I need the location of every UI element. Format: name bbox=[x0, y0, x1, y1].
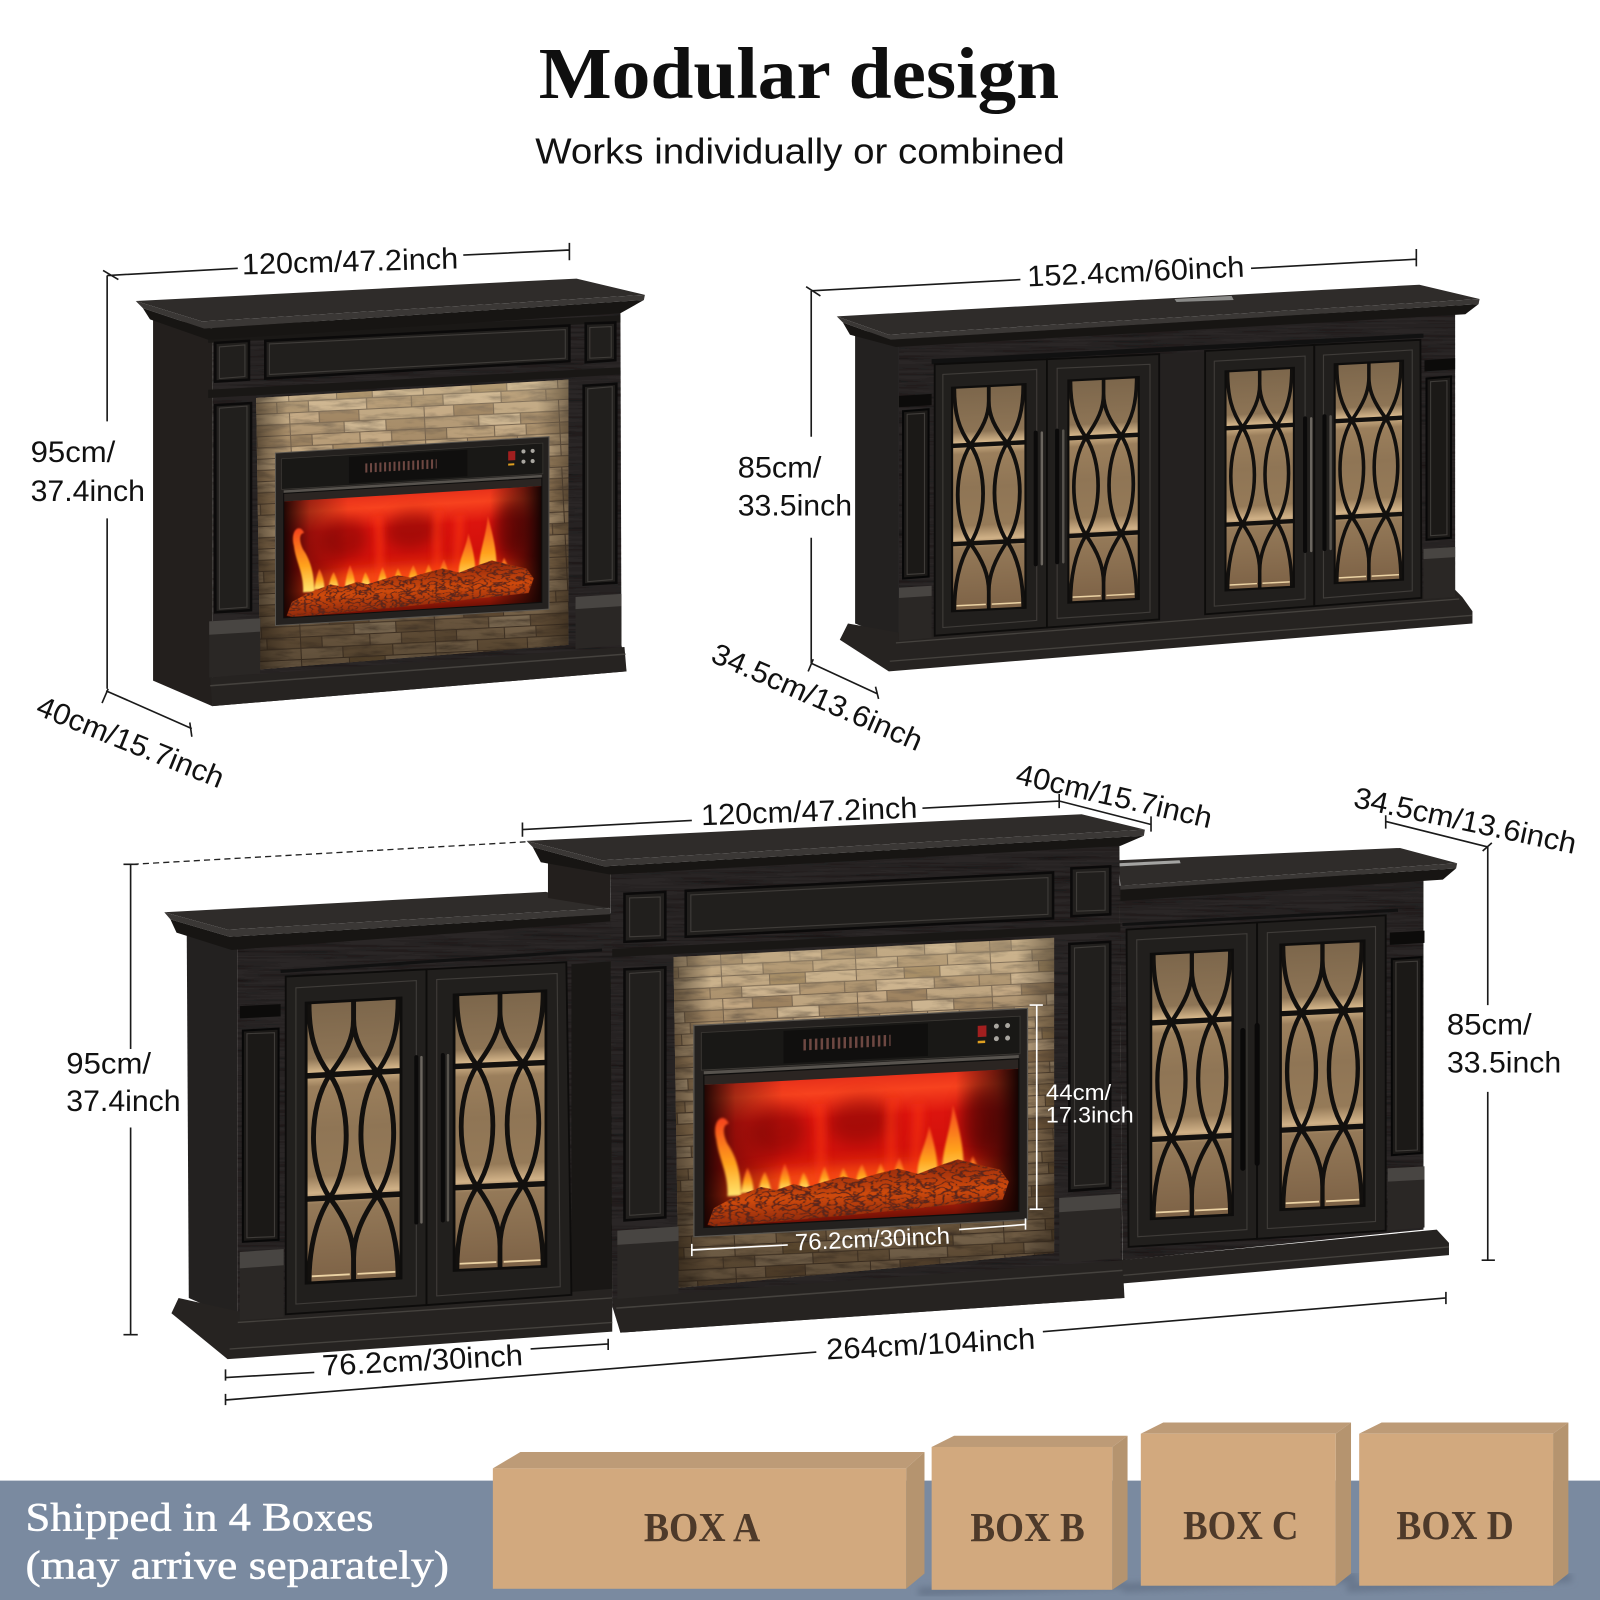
width label: 152.4cm/60inch bbox=[1026, 251, 1245, 294]
cabinet top bbox=[837, 285, 1480, 347]
central pilasters bbox=[617, 942, 1120, 1299]
height label: 85cm/ bbox=[738, 452, 822, 485]
dimensions: standalone fireplace bbox=[31, 242, 569, 795]
box A: BOX A bbox=[644, 1505, 761, 1550]
shipping text: Shipped in 4 Boxes bbox=[26, 1496, 373, 1540]
glass lattice left cabinet door 1 bbox=[306, 998, 401, 1283]
height label: 95cm/ bbox=[31, 436, 116, 469]
left cabinet top bbox=[164, 892, 610, 950]
cabinet height label: 33.5inch bbox=[1447, 1046, 1561, 1079]
heater dimensions: 17.3inch bbox=[1046, 1102, 1134, 1127]
depth label: 34.5cm/13.6inch bbox=[707, 637, 928, 758]
dashed height guide bbox=[133, 842, 526, 864]
overall width label: 264cm/104inch bbox=[825, 1323, 1036, 1367]
electric heater with flames bbox=[276, 437, 549, 626]
height label: 33.5inch bbox=[738, 489, 852, 522]
box A bbox=[493, 1452, 924, 1589]
glass lattice right cabinet door 2 bbox=[1281, 941, 1364, 1210]
right cabinet top bbox=[1118, 848, 1457, 901]
left cabinet doors bbox=[286, 962, 571, 1314]
stone surround bbox=[256, 380, 568, 669]
central fireplace bbox=[527, 814, 1145, 1333]
dimensions: standalone cabinet bbox=[707, 249, 1416, 758]
depth label: 40cm/15.7inch bbox=[32, 690, 229, 795]
cabinet body bbox=[840, 306, 1472, 671]
panel: combined set bbox=[164, 814, 1457, 1359]
box C bbox=[1141, 1422, 1351, 1586]
pilasters and plinths bbox=[209, 384, 621, 678]
cabinet height label: 85cm/ bbox=[1447, 1009, 1532, 1042]
left cabinet bbox=[164, 892, 612, 1359]
central stone surround bbox=[673, 938, 1054, 1288]
right cabinet doors bbox=[1127, 915, 1386, 1247]
left cabinet pilaster bbox=[240, 1004, 284, 1320]
overall height label: 95cm/ bbox=[66, 1047, 152, 1080]
heater dimensions bbox=[692, 1005, 1134, 1256]
glass lattice door 4 bbox=[1335, 361, 1403, 583]
right cabinet body bbox=[1119, 871, 1449, 1284]
glass lattice right cabinet door 1 bbox=[1151, 950, 1233, 1219]
glass lattice left cabinet door 2 bbox=[454, 991, 546, 1270]
dimensions: combined set bbox=[66, 758, 1579, 1405]
fireplace body bbox=[153, 306, 627, 706]
width label: 120cm/47.2inch bbox=[241, 242, 459, 281]
shipping text: (may arrive separately) bbox=[26, 1544, 449, 1588]
glass lattice door 3 bbox=[1226, 368, 1294, 590]
right cabinet pilaster bbox=[1388, 931, 1424, 1231]
central frieze panels bbox=[624, 866, 1110, 942]
overall height label: 37.4inch bbox=[66, 1085, 181, 1118]
heater dimensions: 76.2cm/30inch bbox=[794, 1223, 951, 1255]
cabinet doors bbox=[935, 340, 1421, 636]
right cabinet lintel bbox=[1122, 910, 1398, 924]
left cabinet body bbox=[171, 913, 612, 1359]
shipping band bbox=[0, 1481, 1600, 1600]
cabinet depth label: 34.5cm/13.6inch bbox=[1351, 781, 1579, 861]
box D: BOX D bbox=[1396, 1503, 1514, 1548]
title: Modular design bbox=[539, 33, 1059, 114]
mantel top bbox=[136, 279, 645, 340]
pilasters bbox=[899, 358, 1455, 641]
height label: 37.4inch bbox=[31, 475, 145, 508]
center depth label: 40cm/15.7inch bbox=[1013, 758, 1215, 835]
left cabinet handles bbox=[416, 1055, 448, 1222]
box D bbox=[1359, 1422, 1568, 1586]
heater dimensions: 44cm/ bbox=[1046, 1080, 1112, 1105]
dimension lines bbox=[123, 794, 1495, 1405]
panel: standalone fireplace bbox=[136, 279, 645, 706]
box B bbox=[932, 1436, 1128, 1590]
door handles bbox=[1036, 416, 1331, 564]
left cabinet lintel bbox=[281, 950, 602, 971]
right cabinet handles bbox=[1243, 1026, 1257, 1168]
box B: BOX B bbox=[970, 1505, 1085, 1550]
right cabinet bbox=[1118, 848, 1457, 1284]
center width label: 120cm/47.2inch bbox=[701, 792, 918, 832]
frieze panels bbox=[215, 322, 615, 382]
subtitle: Works individually or combined bbox=[535, 131, 1065, 171]
central body bbox=[548, 842, 1124, 1333]
glass lattice door 1 bbox=[952, 384, 1026, 611]
central mantel top bbox=[527, 814, 1145, 874]
dimension lines bbox=[806, 249, 1416, 699]
panel: standalone cabinet bbox=[837, 285, 1480, 671]
box shadows bbox=[918, 1578, 1571, 1592]
cabinet width label: 76.2cm/30inch bbox=[321, 1339, 524, 1383]
central electric heater with flames bbox=[694, 1008, 1028, 1237]
dimension lines bbox=[102, 243, 569, 737]
glass lattice door 2 bbox=[1068, 377, 1139, 603]
box C: BOX C bbox=[1183, 1503, 1298, 1548]
